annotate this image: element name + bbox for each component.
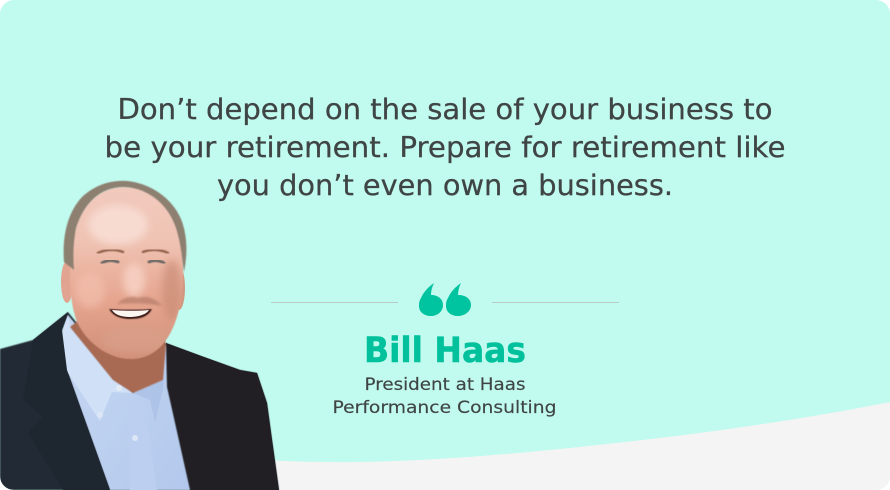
quote text: you don’t even own a business.: [217, 169, 673, 202]
shirt: [62, 315, 190, 490]
eyes: [102, 261, 164, 263]
hair: [64, 181, 186, 272]
shirt placket: [130, 489, 157, 490]
neck: [70, 315, 166, 393]
portrait of Bill Haas: [0, 181, 279, 490]
left lapel: [33, 312, 110, 490]
eyebrows: [98, 250, 168, 253]
shirt buttons: [116, 385, 122, 391]
mouth: [109, 309, 152, 319]
teeth: [112, 310, 149, 317]
left ear: [61, 262, 72, 303]
face: [70, 187, 183, 359]
cheek left: [75, 272, 105, 308]
quote text: [104, 93, 786, 202]
right jacket shade: [166, 343, 279, 490]
cheek right: [162, 260, 182, 320]
chin shadow: [114, 337, 168, 350]
face shading: [75, 205, 182, 354]
right collar: [134, 380, 164, 420]
job title: [332, 375, 556, 418]
left collar: [62, 315, 133, 421]
forehead highlight: [88, 205, 148, 245]
quote text: be your retirement. Prepare for retirement like: [104, 131, 786, 164]
job title: Performance Consulting: [332, 398, 556, 418]
grey wave footer: [240, 402, 890, 490]
divider right: [492, 302, 619, 303]
nose highlight: [123, 263, 145, 297]
jacket: [0, 312, 279, 490]
divider left: [271, 302, 398, 303]
icon: quotation marks: [419, 283, 471, 316]
upper lip shade: [117, 297, 162, 306]
name heading: Bill Haas: [364, 331, 526, 371]
job title: President at Haas: [364, 375, 526, 395]
right ear: [178, 270, 185, 310]
quote text: Don’t depend on the sale of your business to: [118, 93, 772, 126]
